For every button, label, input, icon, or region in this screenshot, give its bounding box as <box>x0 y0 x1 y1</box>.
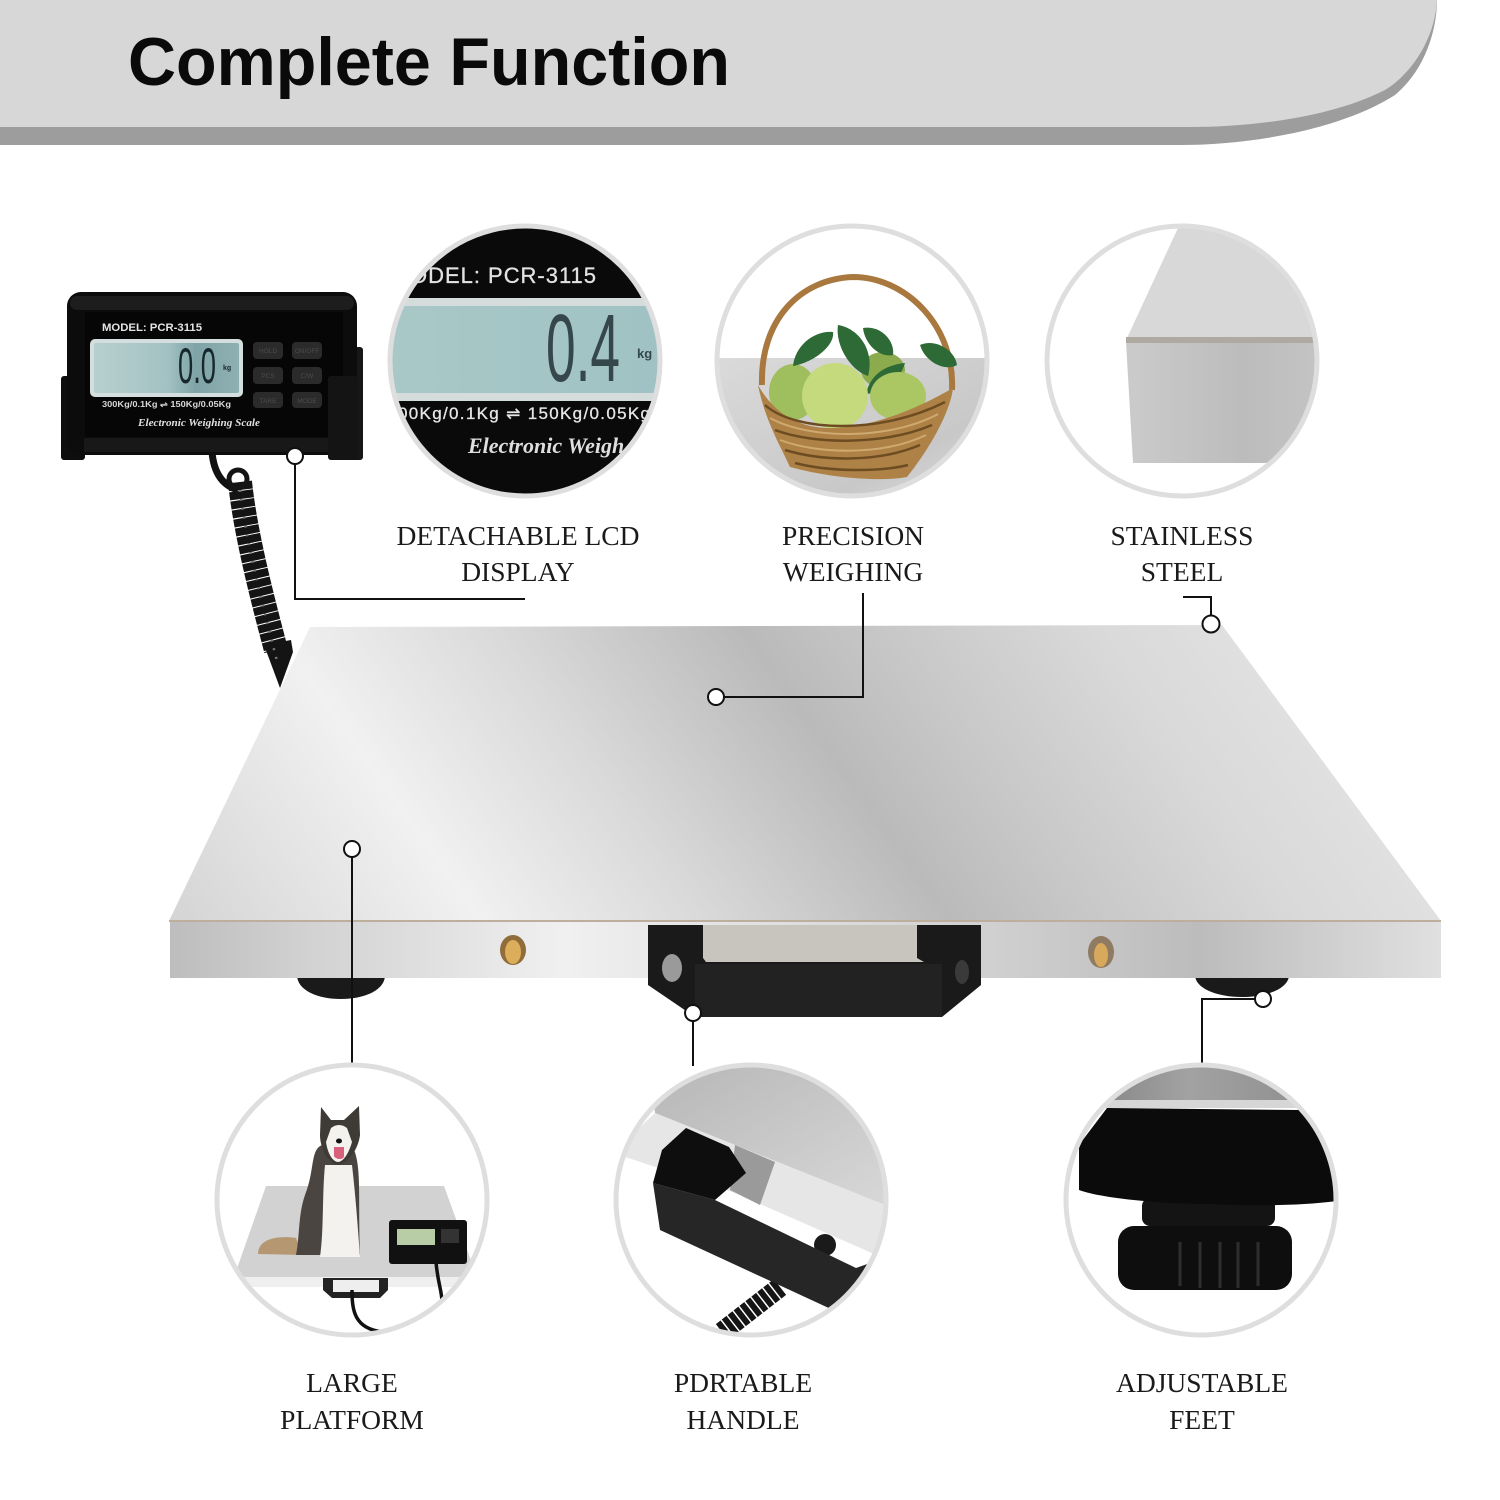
callout: feet <box>1202 991 1271 1064</box>
label: large platform: LARGE <box>306 1367 398 1398</box>
label: adjustable feet <box>1116 1367 1288 1435</box>
dog <box>258 1106 360 1257</box>
label: stainless steel <box>1111 520 1253 587</box>
brand text: Electronic Weighing Scale <box>137 418 260 429</box>
header banner <box>0 0 1437 145</box>
detachable display unit <box>61 292 363 460</box>
lcd screen: kg <box>223 365 231 372</box>
front edge <box>170 921 1441 978</box>
label: stainless steel: STEEL <box>1141 556 1223 587</box>
mini handle <box>323 1278 388 1298</box>
capacity text: 300Kg/0.1Kg ⇌ 150Kg/0.05Kg <box>102 400 231 409</box>
right foot <box>1195 975 1289 997</box>
keypad <box>253 342 322 408</box>
label: detachable LCD display <box>396 520 640 587</box>
circle: LCD closeup: Electronic Weigh <box>467 433 624 458</box>
label: detachable LCD display: DISPLAY <box>461 556 575 587</box>
circle: stainless steel corner <box>1045 225 1322 500</box>
label: stainless steel: STAINLESS <box>1111 520 1253 551</box>
label: detachable LCD display: DETACHABLE LCD <box>396 520 640 551</box>
mini cords <box>352 1262 442 1332</box>
scale platform <box>169 625 1441 1017</box>
basket body <box>758 385 953 479</box>
label: adjustable feet: ADJUSTABLE <box>1116 1367 1288 1398</box>
circle: LCD closeup: ODEL: PCR-3115 <box>410 263 596 288</box>
circle: handle closeup <box>613 1063 890 1338</box>
callout: stainless <box>1183 597 1220 632</box>
label: portable handle: HANDLE <box>686 1404 800 1435</box>
circle: LCD closeup: 00Kg/0.1Kg ⇌ 150Kg/0.05Kg <box>398 404 650 423</box>
keypad: HOLD <box>259 348 277 355</box>
keypad: ON/OFF <box>295 348 319 355</box>
label: precision weighing: PRECISION <box>782 520 924 551</box>
top plate <box>169 625 1441 921</box>
label: adjustable feet: FEET <box>1169 1404 1235 1435</box>
label: precision weighing: WEIGHING <box>783 556 923 587</box>
handle <box>648 925 981 1017</box>
callout: large platform <box>344 841 360 1065</box>
circle: LCD closeup: 0.4 <box>546 295 620 402</box>
circle: fruit basket <box>715 225 990 500</box>
left bolt <box>500 935 526 965</box>
lcd screen: 0.0 <box>178 338 216 394</box>
label: large platform: PLATFORM <box>280 1404 424 1435</box>
leaves <box>793 325 957 394</box>
left foot <box>297 975 385 999</box>
circle: dog on platform <box>215 1063 490 1338</box>
callout: handle <box>685 1005 701 1066</box>
callout: LCD <box>287 448 525 599</box>
title: Complete Function <box>128 24 730 100</box>
model text: MODEL: PCR-3115 <box>102 322 202 334</box>
keypad: TARE <box>260 398 277 405</box>
coiled cable <box>212 452 293 688</box>
keypad: C/W <box>301 373 314 380</box>
lcd screen <box>90 338 243 397</box>
keypad: MODE <box>297 398 317 405</box>
label: portable handle <box>674 1367 812 1435</box>
label: portable handle: PDRTABLE <box>674 1367 812 1398</box>
fruit <box>769 325 957 429</box>
basket handle <box>762 277 952 390</box>
right bolt <box>1088 936 1114 968</box>
circle: adjustable foot closeup <box>1065 1063 1340 1338</box>
label: large platform <box>280 1367 424 1435</box>
mini display <box>389 1220 467 1264</box>
keypad: PCS <box>261 373 275 380</box>
label: precision weighing <box>782 520 924 587</box>
circle: LCD closeup <box>385 220 665 505</box>
circle: LCD closeup: kg <box>637 346 652 361</box>
callout: precision <box>708 593 863 705</box>
